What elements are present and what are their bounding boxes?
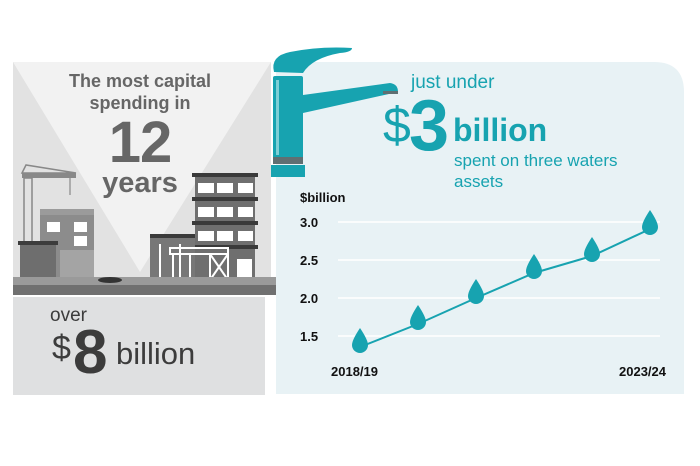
text: $8 billion: $: [52, 329, 71, 367]
x label start: 2018/19: [331, 364, 378, 379]
text: spent on three waters assets: [454, 151, 617, 191]
text: 3.0: [300, 215, 318, 230]
text: years: years: [102, 167, 178, 199]
road: [13, 277, 278, 285]
text: just under: just under: [411, 72, 494, 93]
text: 2.5: [300, 253, 318, 268]
chart axis labels: [300, 190, 346, 344]
chart axis labels: $billion: [300, 190, 346, 205]
text: spent on three waters assets: spent on three waters: [454, 151, 617, 170]
text: $3 billion: billion: [453, 112, 547, 148]
text: spent on three waters assets: assets: [454, 172, 503, 191]
icon: tap: [271, 48, 398, 177]
heading: most capital spending: spending in: [90, 93, 190, 113]
text: $3 billion: $: [383, 97, 411, 153]
text: $3 billion: [383, 86, 547, 166]
heading: most capital spending: [69, 71, 211, 113]
big number 12: 12: [109, 110, 171, 175]
illustration: crane and left buildings: [18, 165, 94, 277]
text: $3 billion: 3: [409, 86, 449, 166]
text: 1.5: [300, 329, 318, 344]
text: over: over: [50, 305, 87, 326]
text: 2.0: [300, 291, 318, 306]
heading: most capital spending: The most capital: [69, 71, 211, 91]
text: $8 billion: 8: [73, 318, 107, 387]
text: $8 billion: billion: [116, 336, 195, 371]
illustration: right buildings: [150, 173, 258, 280]
x label end: 2023/24: [619, 364, 666, 379]
text: $8 billion: [52, 318, 195, 387]
